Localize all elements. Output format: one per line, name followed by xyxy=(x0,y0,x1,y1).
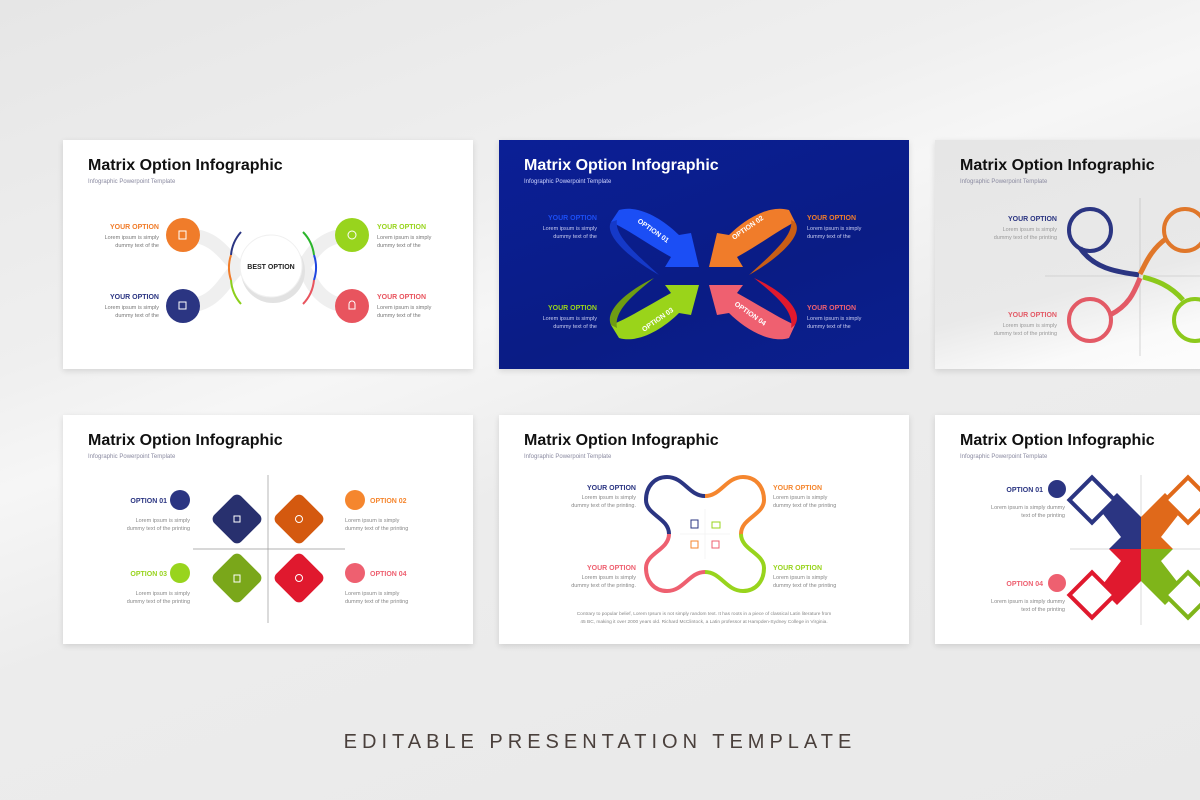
clover xyxy=(646,477,764,591)
slide 4: diamonds xyxy=(63,415,473,644)
option texts: Lorem ipsum is simply xyxy=(773,495,828,501)
center circle: best option xyxy=(240,235,305,303)
option texts: Lorem ipsum is simply xyxy=(807,316,862,322)
option labels: Lorem ipsum is simply dummy xyxy=(991,505,1065,511)
diamonds xyxy=(210,492,326,605)
slide 2: arrows on blue xyxy=(499,140,909,369)
option labels: dummy text of the printing xyxy=(127,599,190,605)
option texts: Lorem ipsum is simply xyxy=(1003,227,1057,233)
option texts: YOUR OPTION xyxy=(377,294,426,301)
arrows: OPTION 01 xyxy=(636,218,670,245)
option texts: Lorem ipsum is simply xyxy=(543,226,597,232)
option labels: Lorem ipsum is simply dummy xyxy=(991,599,1065,605)
option texts: dummy text of the xyxy=(553,324,597,330)
option labels: OPTION 01 xyxy=(1006,487,1043,494)
option texts: dummy text of the xyxy=(115,313,159,319)
title xyxy=(960,157,1155,185)
option texts: YOUR OPTION xyxy=(773,565,822,572)
option texts: dummy text of the xyxy=(377,313,421,319)
option texts: dummy text of the xyxy=(807,234,851,240)
option labels xyxy=(127,490,408,605)
slide 3: swirl rings (cropped) xyxy=(935,140,1200,369)
rings xyxy=(1069,209,1200,341)
center circle: best option: BEST OPTION xyxy=(247,264,295,271)
title: Matrix Option Infographic xyxy=(88,432,283,449)
slide 6: diamond arrows (cropped) xyxy=(935,415,1200,644)
option texts: dummy text of the printing. xyxy=(571,503,636,509)
option texts: YOUR OPTION xyxy=(110,294,159,301)
option labels: OPTION 04 xyxy=(370,571,407,578)
option texts: dummy text of the printing. xyxy=(571,583,636,589)
option texts: dummy text of the xyxy=(553,234,597,240)
title xyxy=(88,432,283,460)
option labels: dummy text of the printing xyxy=(345,599,408,605)
option labels: Lorem ipsum is simply xyxy=(345,518,400,524)
option texts: Lorem ipsum is simply xyxy=(377,235,432,241)
option labels: Lorem ipsum is simply xyxy=(136,518,190,524)
title xyxy=(960,432,1155,460)
title: Infographic Powerpoint Template xyxy=(960,179,1048,185)
title xyxy=(524,157,719,185)
option texts: Lorem ipsum is simply xyxy=(582,495,636,501)
title: Infographic Powerpoint Template xyxy=(960,454,1048,460)
option texts: YOUR OPTION xyxy=(587,485,636,492)
title: Matrix Option Infographic xyxy=(960,157,1155,174)
option texts: dummy text of the printing xyxy=(773,583,836,589)
option labels: text of the printing xyxy=(1021,607,1065,613)
title xyxy=(524,432,719,460)
title: Matrix Option Infographic xyxy=(524,432,719,449)
title: Infographic Powerpoint Template xyxy=(524,454,612,460)
option circles xyxy=(166,218,369,323)
title: Matrix Option Infographic xyxy=(960,432,1155,449)
option labels: Lorem ipsum is simply xyxy=(136,591,190,597)
option texts: YOUR OPTION xyxy=(587,565,636,572)
option labels: dummy text of the printing xyxy=(127,526,190,532)
option texts: YOUR OPTION xyxy=(1008,216,1057,223)
option texts: YOUR OPTION xyxy=(548,215,597,222)
option texts: YOUR OPTION xyxy=(773,485,822,492)
option labels: OPTION 03 xyxy=(130,571,167,578)
arrows: OPTION 03 xyxy=(641,307,675,334)
option texts: 45 BC, making it over 2000 years old. Richard McClintock, a Latin professor at Hampden-Sydney College in Virginia. xyxy=(580,619,828,625)
option texts xyxy=(994,216,1057,337)
axes xyxy=(1045,198,1200,356)
option texts xyxy=(105,224,432,319)
option texts: Lorem ipsum is simply xyxy=(105,235,159,241)
title: Infographic Powerpoint Template xyxy=(524,179,612,185)
arrows: OPTION 02 xyxy=(731,215,765,242)
slide 1: best option xyxy=(63,140,473,369)
option texts: YOUR OPTION xyxy=(807,215,856,222)
option texts: YOUR OPTION xyxy=(110,224,159,231)
option texts: YOUR OPTION xyxy=(548,305,597,312)
option texts: Lorem ipsum is simply xyxy=(1003,323,1057,329)
axes xyxy=(193,475,345,623)
colored arcs xyxy=(229,232,316,304)
title: Infographic Powerpoint Template xyxy=(88,454,176,460)
title: Matrix Option Infographic xyxy=(524,157,719,174)
option texts: dummy text of the printing xyxy=(994,331,1057,337)
option texts: YOUR OPTION xyxy=(377,224,426,231)
option texts: Lorem ipsum is simply xyxy=(105,305,159,311)
option labels: OPTION 01 xyxy=(130,498,167,505)
gray connectors xyxy=(185,235,351,306)
option texts: dummy text of the xyxy=(115,243,159,249)
option texts: Lorem ipsum is simply xyxy=(807,226,862,232)
option texts: Lorem ipsum is simply xyxy=(582,575,636,581)
option labels: text of the printing xyxy=(1021,513,1065,519)
option texts: dummy text of the printing xyxy=(994,235,1057,241)
option texts: dummy text of the printing xyxy=(773,503,836,509)
option labels: OPTION 04 xyxy=(1006,581,1043,588)
option texts xyxy=(571,485,836,625)
option texts: Lorem ipsum is simply xyxy=(377,305,432,311)
bars and diamonds xyxy=(1069,477,1200,618)
option texts: YOUR OPTION xyxy=(807,305,856,312)
option texts: Lorem ipsum is simply xyxy=(773,575,828,581)
option labels: OPTION 02 xyxy=(370,498,407,505)
title: Matrix Option Infographic xyxy=(88,157,283,174)
slide 5: clover shape xyxy=(499,415,909,644)
option labels: Lorem ipsum is simply xyxy=(345,591,400,597)
axes xyxy=(1070,475,1200,625)
title: Infographic Powerpoint Template xyxy=(88,179,176,185)
option texts: dummy text of the xyxy=(377,243,421,249)
option texts: dummy text of the xyxy=(807,324,851,330)
option texts: Lorem ipsum is simply xyxy=(543,316,597,322)
option texts xyxy=(543,215,862,330)
option labels xyxy=(991,480,1066,613)
title xyxy=(88,157,283,185)
footer heading: EDITABLE PRESENTATION TEMPLATE xyxy=(344,731,856,753)
arrows: OPTION 04 xyxy=(733,301,767,328)
option labels: dummy text of the printing xyxy=(345,526,408,532)
option texts: YOUR OPTION xyxy=(1008,312,1057,319)
arrows xyxy=(610,209,797,339)
option texts: Contrary to popular belief, Lorem Ipsum is not simply random text. It has roots in a piece of classical Latin literature from xyxy=(577,611,831,617)
